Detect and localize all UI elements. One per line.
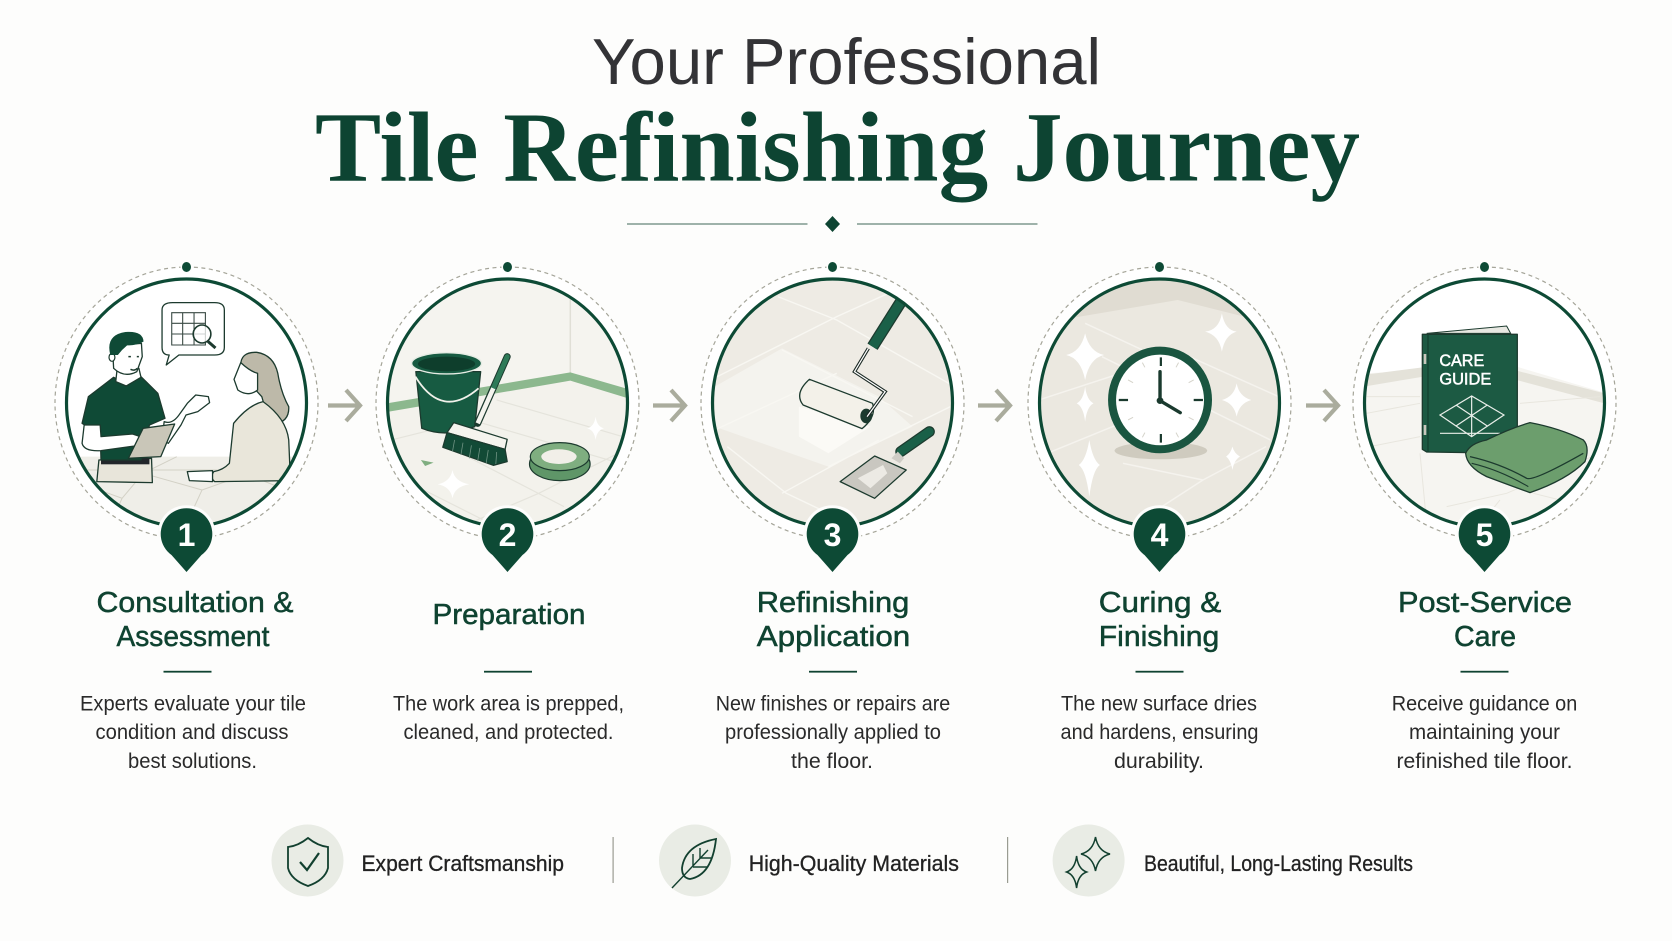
step 2 description: The work area is prepped, bbox=[393, 692, 624, 716]
step 1 description: condition and discuss bbox=[96, 721, 288, 744]
step 1 heading: Assessment bbox=[116, 621, 270, 653]
step 2 illustration bbox=[389, 280, 626, 522]
step 2: preparation bbox=[376, 262, 640, 572]
step 5 heading: Care bbox=[1454, 621, 1516, 653]
step 1 text bbox=[80, 587, 306, 773]
step 3 heading: Application bbox=[757, 621, 910, 653]
arrow 4 to 5 bbox=[1306, 390, 1338, 421]
step 1 dashed ring bbox=[55, 267, 318, 539]
step 3 main ring bbox=[712, 279, 952, 527]
step 5 dashed ring bbox=[1353, 267, 1616, 539]
step 5 number pin: 5 bbox=[1476, 517, 1493, 553]
step 3 description bbox=[716, 692, 950, 773]
step 5 illustration: CARE bbox=[1439, 351, 1484, 370]
step 3 number pin: 3 bbox=[824, 517, 841, 553]
step 1: consultation bbox=[55, 262, 320, 572]
arrow 3 to 4 bbox=[978, 390, 1010, 421]
icon: sparkles bbox=[1053, 824, 1125, 896]
step 2 number pin bbox=[482, 508, 533, 572]
step 2 text bbox=[393, 599, 624, 744]
step 4 description bbox=[1060, 692, 1258, 773]
step 4 heading: Curing & bbox=[1099, 587, 1221, 619]
step 1 main ring bbox=[66, 279, 306, 527]
step 2 description bbox=[393, 692, 624, 744]
arrow 1 to 2 bbox=[328, 390, 360, 421]
step 4 heading: Finishing bbox=[1099, 621, 1219, 653]
step 1 description bbox=[80, 692, 306, 773]
step 2 main ring bbox=[388, 279, 628, 527]
step 5 description: Receive guidance on bbox=[1392, 692, 1577, 716]
step 3 description: the floor. bbox=[791, 750, 873, 773]
step 4: curing and finishing bbox=[1028, 262, 1300, 572]
step 1 number pin bbox=[161, 508, 212, 572]
step 2 heading: Preparation bbox=[432, 599, 586, 631]
step 1 description: Experts evaluate your tile bbox=[80, 692, 306, 716]
feature: expert craftsmanship bbox=[272, 824, 564, 896]
step 1 illustration bbox=[80, 302, 293, 522]
icon: shield bbox=[272, 824, 344, 896]
feature: long-lasting results: Beautiful, Long-Lasting Results bbox=[1144, 851, 1413, 876]
feature: high-quality materials: High-Quality Materials bbox=[749, 851, 959, 876]
step 3 description: professionally applied to bbox=[725, 721, 941, 744]
step 5 text bbox=[1392, 587, 1577, 773]
arrow 2 to 3 bbox=[653, 390, 685, 421]
icon: leaf bbox=[659, 824, 731, 896]
step 5 top dot bbox=[1480, 262, 1489, 272]
step 3 top dot bbox=[828, 262, 837, 272]
title: Your Professional bbox=[592, 25, 1101, 98]
step 4 description: and hardens, ensuring bbox=[1060, 721, 1258, 744]
title bbox=[315, 25, 1360, 202]
step 3 number pin bbox=[807, 508, 858, 572]
step 2 number pin: 2 bbox=[499, 517, 516, 553]
step 4 description: durability. bbox=[1114, 750, 1204, 773]
step 4 main ring bbox=[1040, 279, 1280, 527]
step 1 heading: Consultation & bbox=[96, 587, 294, 619]
step 3 illustration bbox=[714, 280, 951, 522]
step 3: refinishing application bbox=[700, 262, 970, 572]
feature: long-lasting results bbox=[1053, 824, 1413, 896]
step 5 heading bbox=[1398, 587, 1572, 653]
step 4 text bbox=[1060, 587, 1258, 773]
title: Tile Refinishing Journey bbox=[315, 92, 1360, 202]
step 5 description: refinished tile floor. bbox=[1396, 750, 1572, 773]
title divider with diamond bbox=[627, 216, 1038, 232]
step 5 description: maintaining your bbox=[1409, 721, 1560, 744]
step 4 number pin bbox=[1134, 508, 1185, 572]
step 5 number pin bbox=[1459, 508, 1510, 572]
step 2 top dot bbox=[503, 262, 512, 272]
step 3 description: New finishes or repairs are bbox=[716, 692, 950, 716]
step 1 heading bbox=[96, 587, 294, 653]
feature: expert craftsmanship: Expert Craftsmanship bbox=[362, 851, 564, 876]
step 4 illustration bbox=[1041, 280, 1278, 522]
step 4 description: The new surface dries bbox=[1061, 692, 1257, 716]
step 3 dashed ring bbox=[701, 267, 964, 539]
step 5 main ring bbox=[1364, 279, 1604, 527]
feature: high-quality materials bbox=[659, 824, 959, 896]
step 4 number pin: 4 bbox=[1151, 517, 1169, 553]
step 2 description: cleaned, and protected. bbox=[404, 721, 614, 744]
step 1 top dot bbox=[182, 262, 191, 272]
step 4 heading bbox=[1099, 587, 1221, 653]
step 5 illustration: GUIDE bbox=[1439, 369, 1491, 388]
step 3 text bbox=[716, 587, 950, 773]
step 3 heading bbox=[757, 587, 910, 653]
step 1 number pin: 1 bbox=[178, 517, 195, 553]
step 3 heading: Refinishing bbox=[757, 587, 909, 619]
step 1 description: best solutions. bbox=[128, 750, 257, 773]
step 4 top dot bbox=[1155, 262, 1164, 272]
step 5 heading: Post-Service bbox=[1398, 587, 1572, 619]
step 5 illustration bbox=[1366, 326, 1603, 522]
step 4 dashed ring bbox=[1028, 267, 1291, 539]
step 5 description bbox=[1392, 692, 1577, 773]
step 2 dashed ring bbox=[376, 267, 639, 539]
step 5: post-service care bbox=[1353, 262, 1620, 572]
